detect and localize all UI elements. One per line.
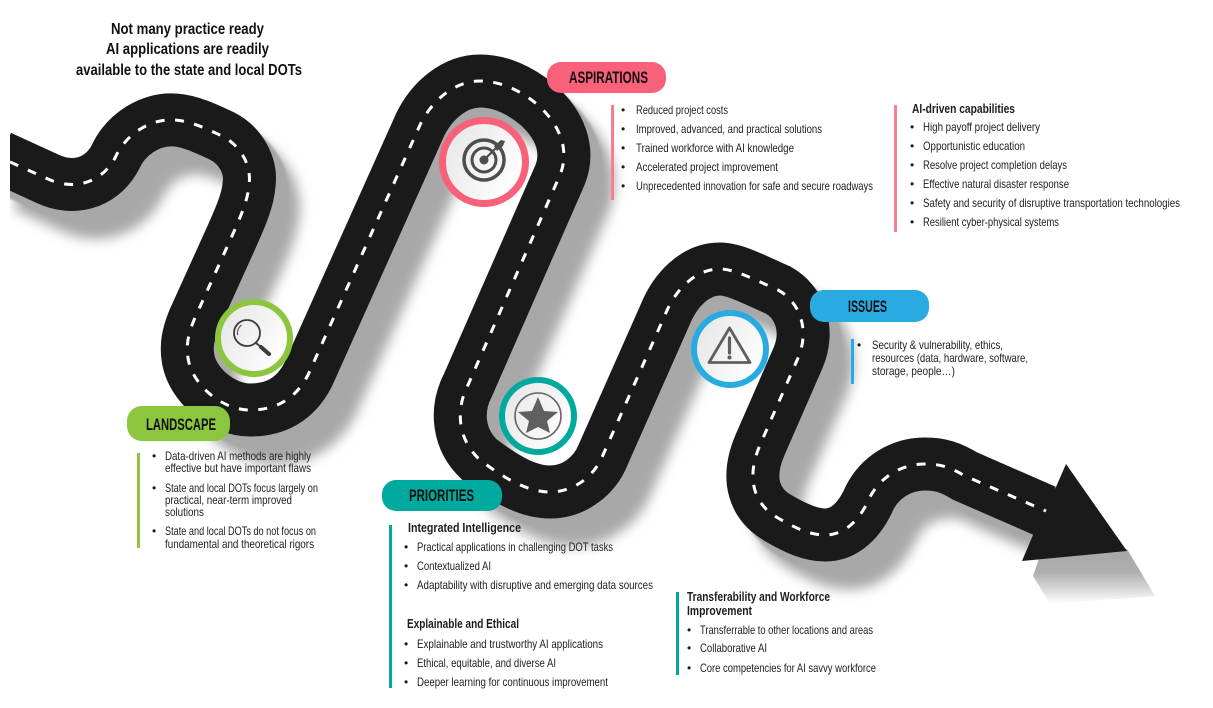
explainable and ethical list bbox=[404, 617, 609, 689]
AI-driven capabilities list: Resolve project completion delays bbox=[923, 158, 1067, 172]
title: available to the state and local DOTs bbox=[76, 62, 302, 79]
AI-driven capabilities list: AI-driven capabilities bbox=[912, 102, 1015, 116]
integrated intelligence list: Contextualized AI bbox=[417, 559, 491, 573]
integrated intelligence list: • bbox=[404, 540, 408, 554]
explainable and ethical list: • bbox=[404, 656, 408, 670]
AI-driven capabilities list: • bbox=[910, 139, 914, 153]
landscape bullet list: • bbox=[152, 481, 156, 495]
issues label pill: ISSUES bbox=[848, 297, 887, 316]
title: Not many practice ready bbox=[111, 21, 264, 38]
explainable and ethical list: Deeper learning for continuous improvement bbox=[417, 675, 609, 689]
integrated intelligence list: • bbox=[404, 559, 408, 573]
explainable and ethical list: Explainable and Ethical bbox=[407, 617, 519, 631]
icon: target bbox=[442, 120, 526, 204]
icon: magnifying glass bbox=[218, 302, 290, 374]
landscape bullet list: • bbox=[152, 449, 156, 463]
aspirations label pill bbox=[547, 62, 666, 93]
aspirations bullet list: Trained workforce with AI knowledge bbox=[636, 141, 794, 155]
transferability and workforce list: Transferability and Workforce bbox=[687, 590, 830, 604]
transferability and workforce list: Improvement bbox=[687, 604, 753, 618]
integrated intelligence list bbox=[389, 521, 653, 688]
landscape bullet list: practical, near-term improved bbox=[165, 493, 292, 507]
transferability and workforce list: Core competencies for AI savvy workforce bbox=[700, 661, 876, 675]
title bbox=[76, 21, 302, 79]
aspirations label pill: ASPIRATIONS bbox=[569, 68, 648, 87]
aspirations bullet list: • bbox=[621, 103, 625, 117]
issues bullet list bbox=[851, 338, 1028, 384]
AI-driven capabilities list: Resilient cyber-physical systems bbox=[923, 215, 1059, 229]
AI-driven capabilities list: • bbox=[910, 158, 914, 172]
road with dashed centre line and arrowhead bbox=[0, 81, 1127, 561]
AI-driven capabilities list: • bbox=[910, 177, 914, 191]
explainable and ethical list: Explainable and trustworthy AI applications bbox=[417, 637, 603, 651]
transferability and workforce list: • bbox=[687, 641, 691, 655]
explainable and ethical list: • bbox=[404, 637, 408, 651]
arrowhead shadow bbox=[1033, 549, 1155, 604]
integrated intelligence list: Adaptability with disruptive and emerging data sources bbox=[417, 578, 653, 592]
landscape bullet list: State and local DOTs do not focus on bbox=[165, 524, 316, 538]
aspirations bullet list: • bbox=[621, 122, 625, 136]
road shadow bbox=[13, 95, 1054, 563]
landscape bullet list bbox=[137, 449, 318, 551]
AI-driven capabilities list: • bbox=[910, 120, 914, 134]
AI-driven capabilities list bbox=[894, 102, 1180, 232]
AI-driven capabilities list: • bbox=[910, 215, 914, 229]
transferability and workforce list bbox=[676, 590, 876, 675]
AI-driven capabilities list: • bbox=[910, 196, 914, 210]
aspirations bullet list: Reduced project costs bbox=[636, 103, 728, 117]
AI-driven capabilities list: High payoff project delivery bbox=[923, 120, 1040, 134]
aspirations bullet list: • bbox=[621, 141, 625, 155]
aspirations bullet list: • bbox=[621, 160, 625, 174]
aspirations bullet list bbox=[611, 103, 873, 200]
panel: issues bbox=[810, 290, 1028, 384]
priorities label pill bbox=[382, 480, 502, 511]
issues bullet list: Security & vulnerability, ethics, bbox=[872, 338, 1003, 352]
integrated intelligence list: Integrated Intelligence bbox=[408, 521, 521, 535]
aspirations bullet list: • bbox=[621, 179, 625, 193]
aspirations bullet list: Unprecedented innovation for safe and secure roadways bbox=[636, 179, 873, 193]
panel: priorities bbox=[382, 480, 876, 689]
landscape bullet list: fundamental and theoretical rigors bbox=[165, 537, 314, 551]
landscape bullet list: effective but have important flaws bbox=[165, 461, 311, 475]
landscape label pill bbox=[127, 406, 230, 441]
aspirations bullet list: Improved, advanced, and practical solutions bbox=[636, 122, 822, 136]
issues bullet list: storage, people…) bbox=[872, 364, 955, 378]
landscape bullet list: solutions bbox=[165, 505, 204, 519]
integrated intelligence list: • bbox=[404, 578, 408, 592]
title: AI applications are readily bbox=[106, 41, 269, 58]
icon: star bbox=[502, 380, 574, 452]
explainable and ethical list: • bbox=[404, 675, 408, 689]
landscape bullet list: Data-driven AI methods are highly bbox=[165, 449, 311, 463]
transferability and workforce list: Transferrable to other locations and areas bbox=[700, 623, 873, 637]
transferability and workforce list: Collaborative AI bbox=[700, 641, 767, 655]
landscape bullet list: State and local DOTs focus largely on bbox=[165, 481, 318, 495]
issues bullet list: • bbox=[857, 338, 861, 352]
landscape label pill: LANDSCAPE bbox=[146, 415, 216, 434]
issues bullet list: resources (data, hardware, software, bbox=[872, 351, 1028, 365]
AI-driven capabilities list: Opportunistic education bbox=[923, 139, 1025, 153]
integrated intelligence list: Practical applications in challenging DOT tasks bbox=[417, 540, 613, 554]
panel: aspirations bbox=[547, 62, 1180, 232]
issues label pill bbox=[810, 290, 929, 322]
panel: landscape bbox=[127, 406, 318, 551]
explainable and ethical list: Ethical, equitable, and diverse AI bbox=[417, 656, 556, 670]
aspirations bullet list: Accelerated project improvement bbox=[636, 160, 779, 174]
transferability and workforce list: • bbox=[687, 661, 691, 675]
landscape bullet list: • bbox=[152, 524, 156, 538]
transferability and workforce list: • bbox=[687, 623, 691, 637]
priorities label pill: PRIORITIES bbox=[409, 486, 474, 505]
AI-driven capabilities list: Effective natural disaster response bbox=[923, 177, 1069, 191]
icon: warning triangle bbox=[694, 313, 766, 385]
